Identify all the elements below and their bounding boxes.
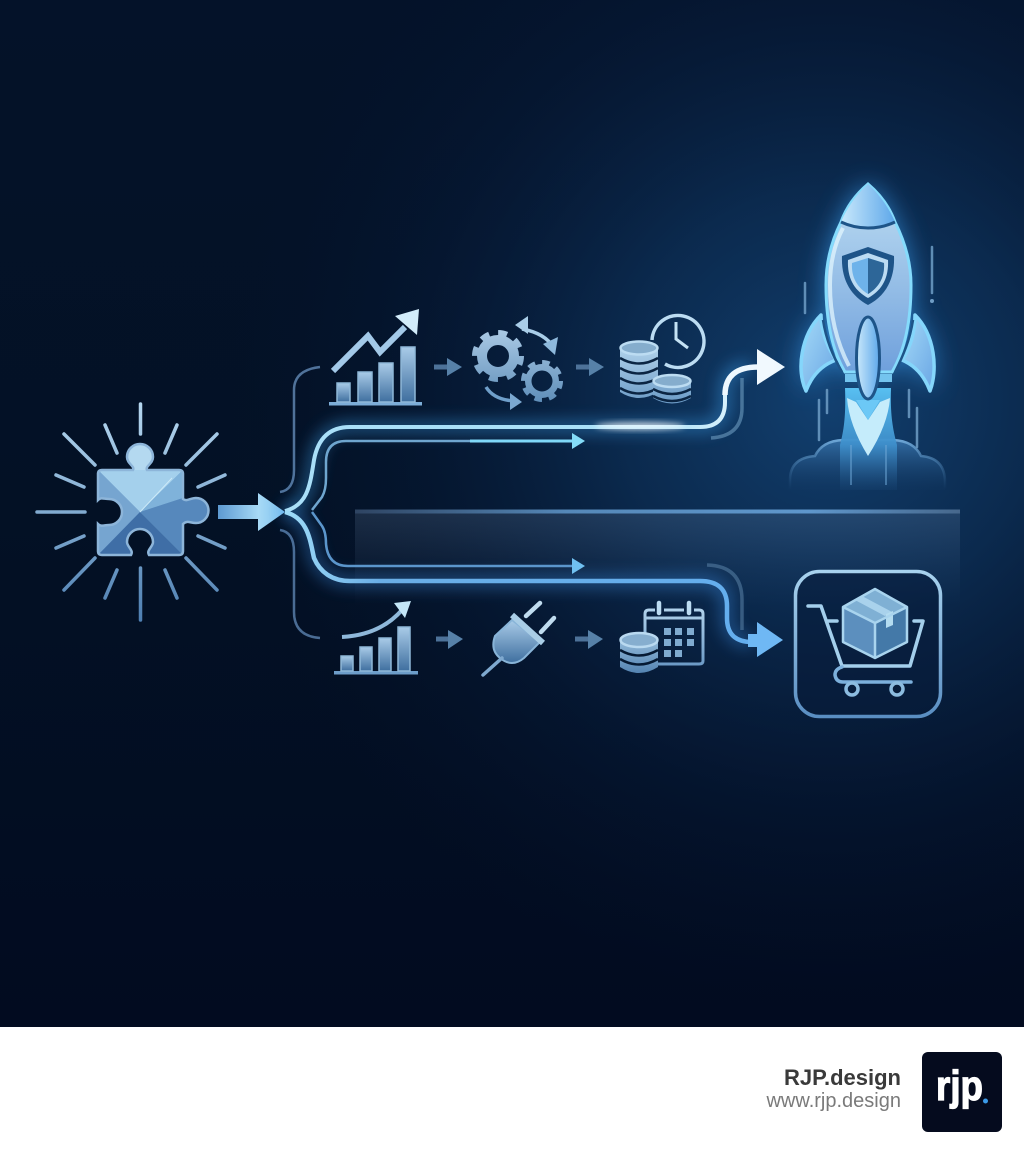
icon: calendar with coins <box>620 603 703 673</box>
footer <box>0 1027 1024 1154</box>
brand url: www.rjp.design <box>765 1090 901 1112</box>
collar <box>845 374 892 382</box>
upper inner arrow <box>312 433 585 510</box>
arrow: chart to gears <box>434 358 462 376</box>
icon: clock with coin stacks <box>620 315 704 404</box>
upper secondary bracket <box>280 367 320 492</box>
center fin <box>856 317 880 399</box>
flame <box>840 388 897 490</box>
lower faded return stroke <box>707 565 742 630</box>
body <box>826 184 911 372</box>
main lower route to cart <box>285 512 783 657</box>
arrow: chart to plug <box>436 630 463 649</box>
lower secondary bracket <box>280 530 320 638</box>
lower inner arrow <box>312 512 585 574</box>
upper path glow <box>285 367 750 511</box>
icon: puzzle piece with rays <box>37 404 225 620</box>
fins <box>801 315 934 391</box>
rays <box>37 404 225 620</box>
icon: rising bar chart <box>329 309 422 406</box>
arrow: plug to coins <box>575 630 603 649</box>
icon: power plug <box>483 603 554 675</box>
exhaust cloud <box>790 440 945 490</box>
main upper route to rocket <box>285 349 785 511</box>
brand name: RJP.design <box>784 1065 901 1090</box>
upper faded return stroke <box>711 378 742 438</box>
nose cone <box>841 184 895 228</box>
arrow: gears to coins <box>576 358 604 376</box>
speed lines <box>805 247 932 447</box>
icon: bar chart with curved arrow <box>334 601 418 674</box>
logo <box>922 1052 1002 1132</box>
rocket glow <box>802 184 933 392</box>
lower path glow <box>285 512 752 642</box>
panel: lower backing band <box>355 510 960 606</box>
arrow: puzzle to branch split <box>218 493 285 531</box>
shield <box>842 247 894 305</box>
puzzle piece <box>96 442 210 556</box>
icon: launching rocket <box>790 184 945 490</box>
icon: gears with cycle arrows <box>475 316 560 410</box>
panel: shopping cart tile <box>796 572 940 716</box>
logo: rjp <box>936 1062 983 1109</box>
icon: cart <box>808 606 923 695</box>
icon: parcel box <box>843 589 907 658</box>
